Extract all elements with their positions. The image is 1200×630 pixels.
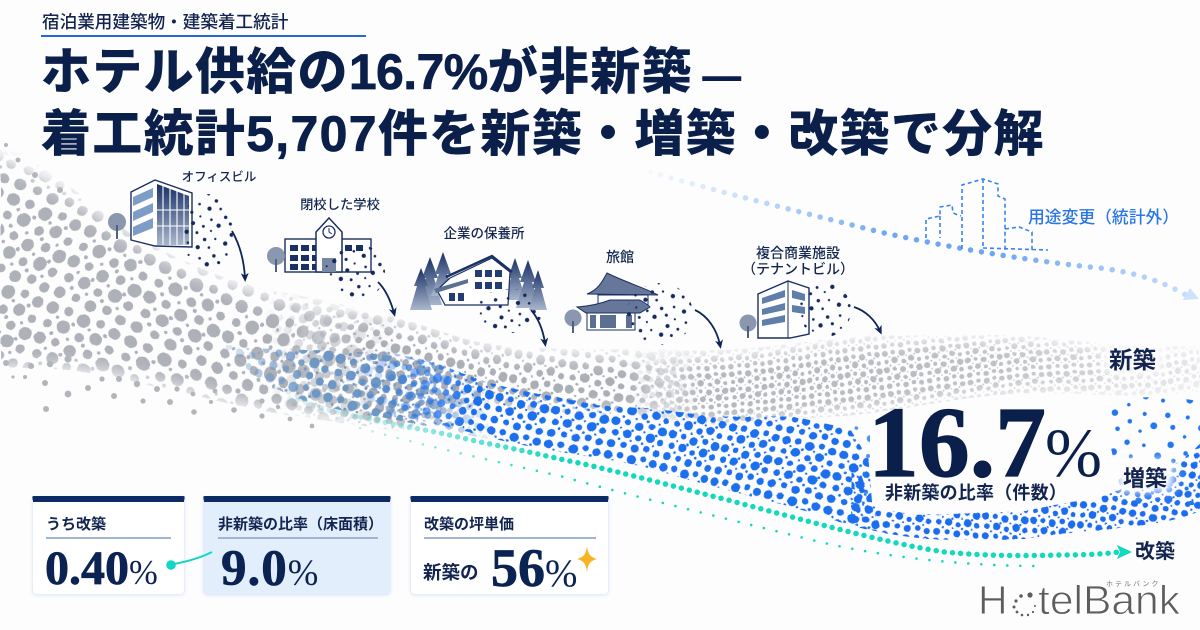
card label: 改築の坪単価 bbox=[424, 516, 514, 533]
label: new construction: 新築 bbox=[1109, 347, 1156, 373]
label: change of use: 用途変更（統計外） bbox=[1028, 208, 1179, 227]
dotted arrow: change of use bbox=[650, 172, 1199, 300]
flow: extension (blue dots) bbox=[220, 340, 1200, 539]
icon: dashed buildings (change of use) bbox=[926, 179, 1048, 250]
card rule bbox=[424, 537, 596, 538]
logo wordmark H: H bbox=[978, 577, 1008, 623]
panel: share of renovation bbox=[32, 496, 185, 595]
dots: office dissolve bbox=[181, 194, 233, 270]
label: retreat: 企業の保養所 bbox=[444, 225, 525, 241]
card text: 新築の bbox=[423, 562, 479, 583]
logo kana: ホテルバンク bbox=[1106, 580, 1160, 588]
dots: ryokan dissolve bbox=[627, 283, 693, 345]
icon: company retreat bbox=[410, 252, 547, 310]
arrow: retreat to flow bbox=[531, 310, 545, 343]
icon: ryokan bbox=[564, 273, 658, 333]
panel: non-new share by floor area bbox=[203, 496, 391, 595]
card label: うち改築 bbox=[46, 516, 106, 533]
connector between cards bbox=[166, 551, 212, 570]
flow artwork bbox=[0, 143, 1200, 568]
dots: retreat dissolve bbox=[475, 289, 545, 333]
dots: school dissolve bbox=[325, 243, 385, 301]
label: ryokan: 旅館 bbox=[606, 249, 634, 265]
dots: tenant dissolve bbox=[799, 283, 851, 337]
icon: office building bbox=[108, 180, 192, 247]
label: renovation: 改築 bbox=[1135, 540, 1175, 563]
icon: sparkle bbox=[577, 546, 597, 572]
card figure: 56% bbox=[491, 538, 577, 598]
big figure percent: % bbox=[1045, 415, 1102, 491]
arrow: school to flow bbox=[378, 282, 394, 313]
card figure: 0.40% bbox=[45, 542, 158, 595]
logo ring of dots bbox=[1012, 592, 1036, 616]
title: ホテル供給の16.7%が非新築 — bbox=[41, 44, 741, 100]
panel: renovation unit price bbox=[410, 496, 609, 595]
flow: new construction (gray dots) bbox=[0, 140, 1200, 432]
label: tenant building: （テナントビル） bbox=[742, 261, 854, 277]
card rule bbox=[218, 537, 378, 538]
label: office: オフィスビル bbox=[182, 170, 256, 184]
card figure: 9.0% bbox=[221, 541, 319, 597]
clearing behind extension label bbox=[1116, 460, 1174, 492]
flow: renovation (teal dotted arrow) bbox=[290, 398, 1132, 566]
arrow: office to flow bbox=[232, 231, 245, 278]
title bbox=[41, 44, 1045, 162]
sparse stray gray dots bbox=[3, 143, 314, 428]
eyebrow: 宿泊業用建築物・建築着工統計 bbox=[42, 12, 288, 32]
label: school: 閉校した学校 bbox=[300, 197, 380, 212]
card label: 非新築の比率（床面積） bbox=[218, 516, 383, 533]
big figure caption: 非新築の比率（件数） bbox=[885, 482, 1067, 503]
icon: closed school bbox=[267, 218, 371, 272]
label: extension: 増築 bbox=[1123, 466, 1167, 491]
card rule bbox=[46, 537, 171, 538]
arrow: ryokan to flow bbox=[695, 310, 720, 345]
label: tenant building: 複合商業施設 bbox=[756, 245, 840, 261]
logo bbox=[978, 577, 1181, 623]
icon: tenant building bbox=[740, 281, 809, 338]
arrow: tenant to flow bbox=[854, 307, 880, 331]
clearing behind new construction label bbox=[1102, 344, 1164, 376]
eyebrow rule bbox=[41, 35, 366, 37]
title: 着工統計5,707件を新築・増築・改築で分解 bbox=[41, 106, 1045, 162]
big figure: 16.7 bbox=[868, 386, 1046, 498]
logo wordmark rest: telBank bbox=[1038, 577, 1181, 623]
